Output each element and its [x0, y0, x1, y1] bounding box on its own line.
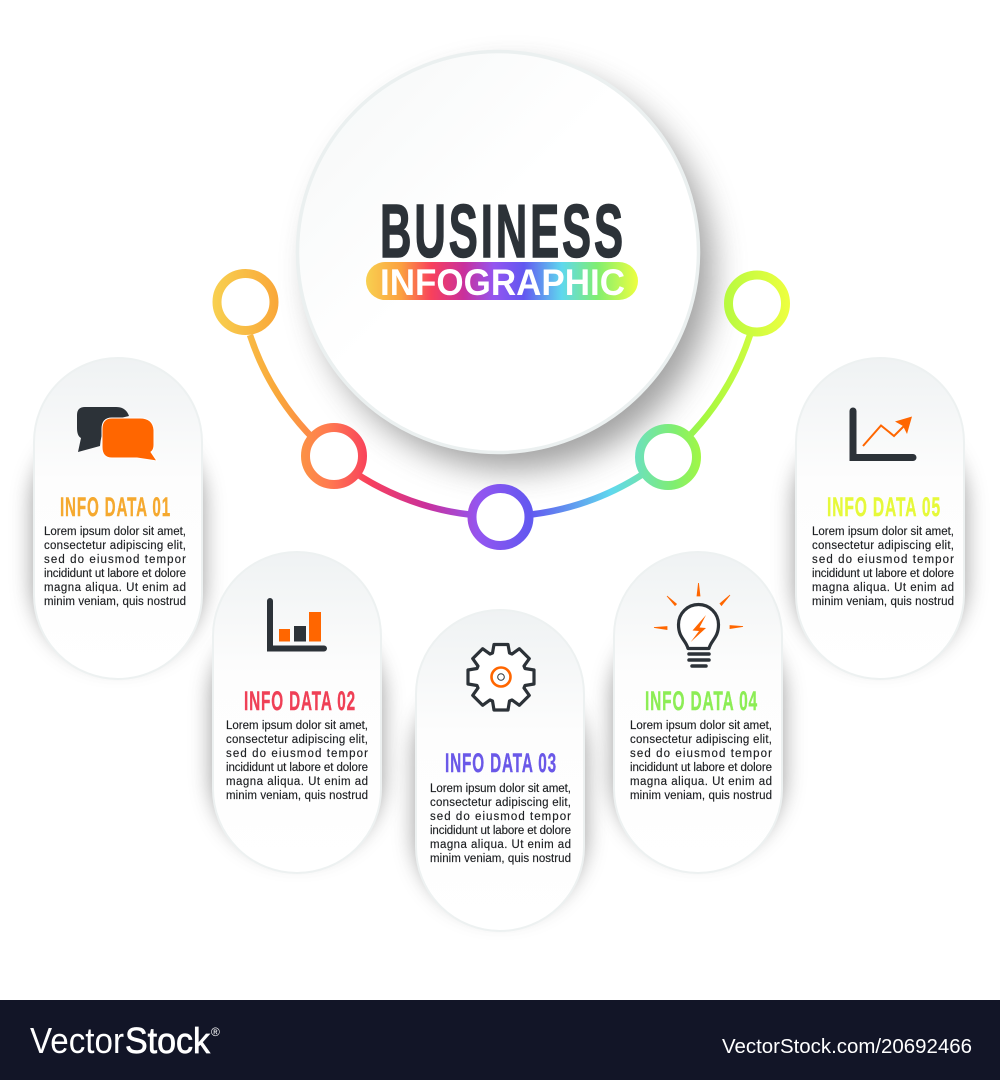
text block: card 05 body [812, 526, 954, 608]
text block: card 02 body: sed do eiusmod tempor [226, 748, 368, 760]
footer logo [30, 1020, 220, 1061]
footer logo: ® [211, 1025, 220, 1039]
text block: card 01 body [44, 526, 186, 608]
panel: card 03 [413, 610, 587, 931]
footer logo: Stock [125, 1020, 211, 1061]
ring 05 [728, 275, 786, 332]
title: business: BUSINESS [380, 189, 626, 273]
text block: card 02 body: Lorem ipsum dolor sit amet, [226, 720, 368, 732]
text block: card 04 body: sed do eiusmod tempor [630, 748, 772, 760]
heading: info data 04: INFO DATA 04 [645, 686, 758, 716]
ring 01 [217, 274, 274, 330]
heading: info data 02: INFO DATA 02 [244, 686, 356, 716]
text block: card 01 body: magna aliqua. Ut enim ad [44, 582, 186, 594]
text block: card 02 body: consectetur adipiscing elit, [226, 734, 368, 746]
text block: card 03 body: sed do eiusmod tempor [430, 811, 571, 823]
text block: card 04 body: Lorem ipsum dolor sit amet, [630, 720, 772, 732]
timeline arc with rings [217, 274, 786, 546]
title: infographic pill: INFOGRAPHIC [380, 262, 625, 303]
icon: chat bubbles [77, 407, 157, 461]
main circle with shadow [298, 52, 713, 470]
icon: gear [468, 644, 534, 710]
text block: card 05 body: minim veniam, quis nostrud [812, 596, 954, 608]
footer url: VectorStock.com/20692466 [722, 1036, 972, 1058]
text block: card 03 body: consectetur adipiscing elit, [430, 797, 571, 809]
text block: card 05 body: consectetur adipiscing elit, [812, 540, 954, 552]
text block: card 05 body: magna aliqua. Ut enim ad [812, 582, 954, 594]
panel: card 05 [793, 358, 967, 679]
text block: card 04 body [630, 720, 772, 802]
text block: card 01 body: minim veniam, quis nostrud [44, 596, 186, 608]
text block: card 01 body: incididunt ut labore et dolore [44, 568, 186, 580]
panel: card 02 [210, 552, 384, 873]
ring 03 [472, 488, 529, 546]
icon: light bulb [654, 583, 743, 666]
text block: card 04 body: magna aliqua. Ut enim ad [630, 776, 772, 788]
text block: card 05 body: Lorem ipsum dolor sit amet, [812, 526, 954, 538]
text block: card 03 body: minim veniam, quis nostrud [430, 853, 571, 865]
text block: card 02 body [226, 720, 368, 802]
text block: card 03 body: incididunt ut labore et dolore [430, 825, 571, 837]
ring 04 [640, 428, 696, 486]
text block: card 01 body: Lorem ipsum dolor sit amet, [44, 526, 186, 538]
text block: card 04 body: minim veniam, quis nostrud [630, 790, 772, 802]
icon: rising line chart [853, 411, 913, 458]
text block: card 02 body: incididunt ut labore et dolore [226, 762, 368, 774]
text block: card 02 body: minim veniam, quis nostrud [226, 790, 368, 802]
icon: bar chart [270, 601, 324, 648]
footer logo: Vector [30, 1020, 124, 1061]
text block: card 04 body: incididunt ut labore et dolore [630, 762, 772, 774]
text block: card 05 body: sed do eiusmod tempor [812, 554, 954, 566]
heading: info data 01: INFO DATA 01 [60, 492, 171, 522]
text block: card 03 body: magna aliqua. Ut enim ad [430, 839, 571, 851]
panel: card 01 [31, 358, 205, 679]
panel: card 04 [611, 552, 785, 873]
heading: info data 03: INFO DATA 03 [445, 748, 557, 778]
text block: card 05 body: incididunt ut labore et dolore [812, 568, 954, 580]
footer bar [0, 1000, 1000, 1080]
ring 02 [306, 428, 362, 484]
text block: card 01 body: sed do eiusmod tempor [44, 554, 186, 566]
text block: card 01 body: consectetur adipiscing elit, [44, 540, 186, 552]
text block: card 03 body: Lorem ipsum dolor sit amet, [430, 783, 571, 795]
text block: card 03 body [430, 783, 571, 865]
text block: card 02 body: magna aliqua. Ut enim ad [226, 776, 368, 788]
text block: card 04 body: consectetur adipiscing elit, [630, 734, 772, 746]
